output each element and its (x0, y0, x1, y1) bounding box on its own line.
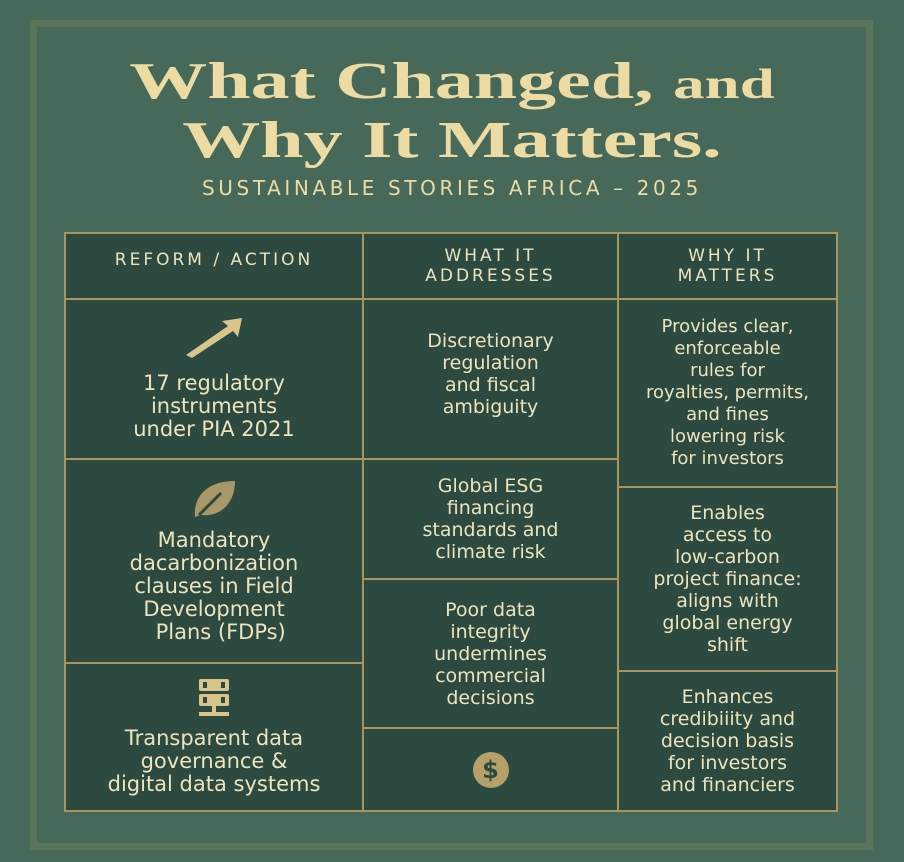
subtitle: SUSTAINABLE STORIES AFRICA – 2025 (202, 176, 702, 200)
row1 matters: lowering risk (670, 426, 785, 447)
row1 matters: royalties, permits, (646, 382, 809, 403)
row2 reform: Plans (FDPs) (156, 620, 286, 644)
header: addresses: WHAT IT (444, 246, 537, 266)
row2 addresses (362, 458, 619, 580)
icon: arrow (186, 318, 242, 358)
row2 matters (617, 486, 838, 672)
icon: dollar coin (472, 752, 508, 788)
row2 addresses: standards and (423, 519, 558, 541)
row3 reform: Transparent data (125, 726, 303, 750)
row3 reform: governance & (141, 748, 287, 772)
row1 reform: under PIA 2021 (133, 416, 295, 440)
row3 matters: decision basis (661, 730, 794, 752)
row3 matters: Enhances (682, 686, 773, 708)
row4 addresses: dollar icon (362, 727, 619, 812)
header: matters: MATTERS (678, 266, 777, 286)
icon: server (199, 679, 229, 716)
icon: dollar coin: $ (482, 756, 499, 784)
row1 addresses: and fiscal (445, 374, 536, 396)
header: addresses (362, 232, 619, 300)
row1 matters: enforceable (674, 338, 781, 359)
row3 matters: and financiers (660, 774, 795, 796)
row1 addresses: ambiguity (443, 396, 538, 418)
row1 addresses: Discretionary (427, 330, 554, 352)
row1 addresses: regulation (442, 352, 539, 374)
row2 addresses: Global ESG (438, 475, 543, 497)
row3 addresses: undermines (434, 642, 547, 664)
row2 matters: access to (683, 524, 772, 546)
icon: leaf (194, 481, 235, 517)
row1 matters: Provides clear, (662, 316, 793, 337)
row2 addresses: financing (447, 497, 534, 519)
row1 matters: for investors (671, 448, 784, 469)
row2 addresses: climate risk (435, 541, 546, 563)
row3 reform: digital data systems (108, 772, 320, 796)
row1 matters: and fines (686, 404, 769, 425)
title: What Changed, and (129, 53, 775, 110)
row1 reform: 17 regulatory (143, 370, 285, 394)
row1 reform: instruments (151, 394, 277, 418)
row1 addresses (362, 298, 619, 460)
row3 matters: credibiiity and (660, 708, 795, 730)
row2 reform: Development (143, 596, 285, 620)
header: reform (64, 232, 364, 300)
row3 matters: for investors (668, 752, 787, 774)
row3 addresses: decisions (446, 686, 535, 708)
row2 matters: Enables (690, 502, 765, 524)
header: reform: REFORM / ACTION (115, 250, 313, 270)
header: matters (617, 232, 838, 300)
row2 matters: global energy (662, 612, 793, 634)
row3 addresses: Poor data (445, 598, 536, 620)
header: addresses: ADDRESSES (425, 266, 556, 286)
row3 addresses (362, 578, 619, 729)
title: Why It Matters. (182, 112, 722, 169)
title (129, 53, 775, 169)
row2 matters: shift (707, 634, 748, 656)
row2 reform (64, 458, 364, 664)
row3 addresses: commercial (435, 664, 546, 686)
row2 matters: project finance: (653, 568, 802, 590)
row3 addresses: integrity (450, 620, 531, 642)
row1 reform (64, 298, 364, 460)
row2 reform: Mandatory (158, 528, 270, 552)
row3 matters (617, 670, 838, 812)
row2 reform: dacarbonization (130, 550, 298, 574)
row3 reform (64, 662, 364, 812)
row2 matters: aligns with (676, 590, 779, 612)
row1 matters: rules for (690, 360, 765, 381)
row2 reform: clauses in Field (134, 574, 294, 598)
row2 matters: low-carbon (675, 546, 780, 568)
row1 matters (617, 298, 838, 488)
header: matters: WHY IT (688, 246, 767, 266)
